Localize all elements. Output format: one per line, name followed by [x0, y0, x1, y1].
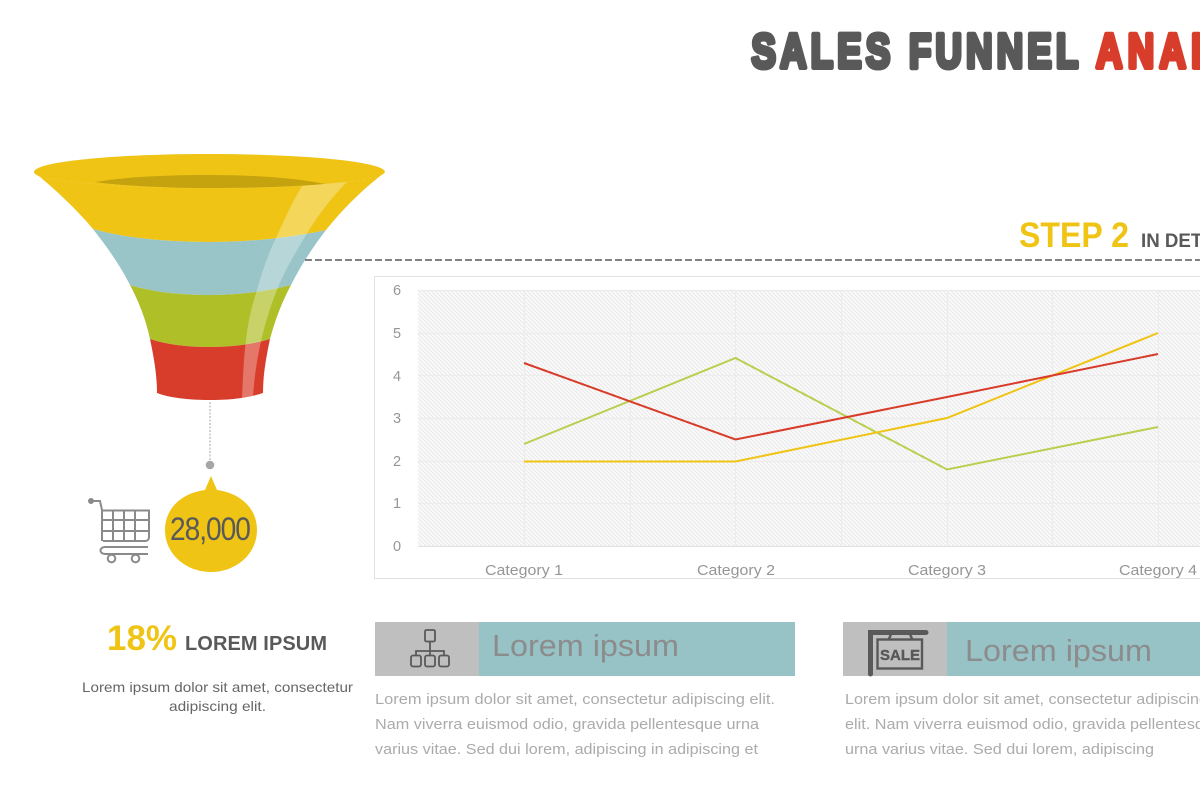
y axis labels: 2 [393, 454, 401, 470]
left stat description: adipiscing elit. [169, 698, 266, 714]
funnel highlight [242, 182, 347, 398]
step heading: STEP 2 [1019, 216, 1129, 255]
body text [845, 691, 1200, 758]
header band [479, 622, 795, 676]
left stat description: Lorem ipsum dolor sit amet, consectetur [82, 679, 353, 695]
left stat heading [107, 619, 327, 658]
y axis labels: 6 [393, 283, 401, 299]
funnel band: yellow [34, 154, 385, 242]
left stat description [82, 679, 353, 714]
icon: shopping cart [89, 499, 149, 562]
chart frame [374, 276, 1200, 578]
funnel graphic [34, 154, 385, 400]
funnel rim line [40, 177, 379, 188]
y axis labels: 0 [393, 539, 401, 555]
series: yellow [524, 333, 1158, 462]
icon tile: sale sign [843, 622, 947, 676]
body text: elit. Nam viverra euismod odio, gravida pellentesque [845, 716, 1200, 733]
icon tile: org chart [375, 622, 479, 676]
funnel opening shadow [95, 175, 325, 188]
dashed connector to chart [305, 259, 1200, 261]
left stat heading: LOREM IPSUM [185, 633, 327, 655]
x axis labels: Category 4 [1119, 563, 1197, 579]
series: red [524, 354, 1158, 440]
body text: Nam viverra euismod odio, gravida pellentesque urna [375, 716, 760, 733]
panel: second text block [843, 622, 1200, 758]
funnel band: red [150, 339, 270, 400]
panel: first text block [375, 622, 795, 758]
funnel band: green [130, 285, 291, 347]
body text: Lorem ipsum dolor sit amet, consectetur adipiscing [845, 691, 1200, 708]
header label: Lorem ipsum [965, 633, 1152, 668]
funnel band: blue [93, 229, 326, 295]
icon tile: sale sign: SALE [880, 647, 920, 664]
x axis labels: Category 1 [485, 563, 563, 579]
y axis labels: 4 [393, 369, 401, 385]
plot area [418, 290, 1200, 546]
body text: Lorem ipsum dolor sit amet, consectetur adipiscing elit. [375, 691, 775, 708]
funnel pointer [206, 402, 214, 469]
x axis labels: Category 2 [697, 563, 775, 579]
y axis labels [393, 283, 401, 555]
y axis labels: 3 [393, 411, 401, 427]
header label: Lorem ipsum [492, 628, 679, 663]
header band [947, 622, 1200, 676]
series: green [524, 358, 1158, 470]
body text [375, 691, 775, 758]
left stat heading: 18% [107, 619, 177, 658]
value bubble [165, 476, 257, 572]
step heading [1019, 216, 1200, 255]
y axis labels: 1 [393, 496, 401, 512]
x axis labels: Category 3 [908, 563, 986, 579]
y axis labels: 5 [393, 326, 401, 342]
line chart [374, 276, 1200, 579]
body text: varius vitae. Sed dui lorem, adipiscing in adipiscing et [375, 741, 759, 758]
bubble value: 28,000 [170, 512, 251, 547]
title: SALES FUNNEL [752, 25, 1078, 79]
body text: urna varius vitae. Sed dui lorem, adipiscing [845, 741, 1154, 758]
x axis labels [485, 563, 1197, 579]
